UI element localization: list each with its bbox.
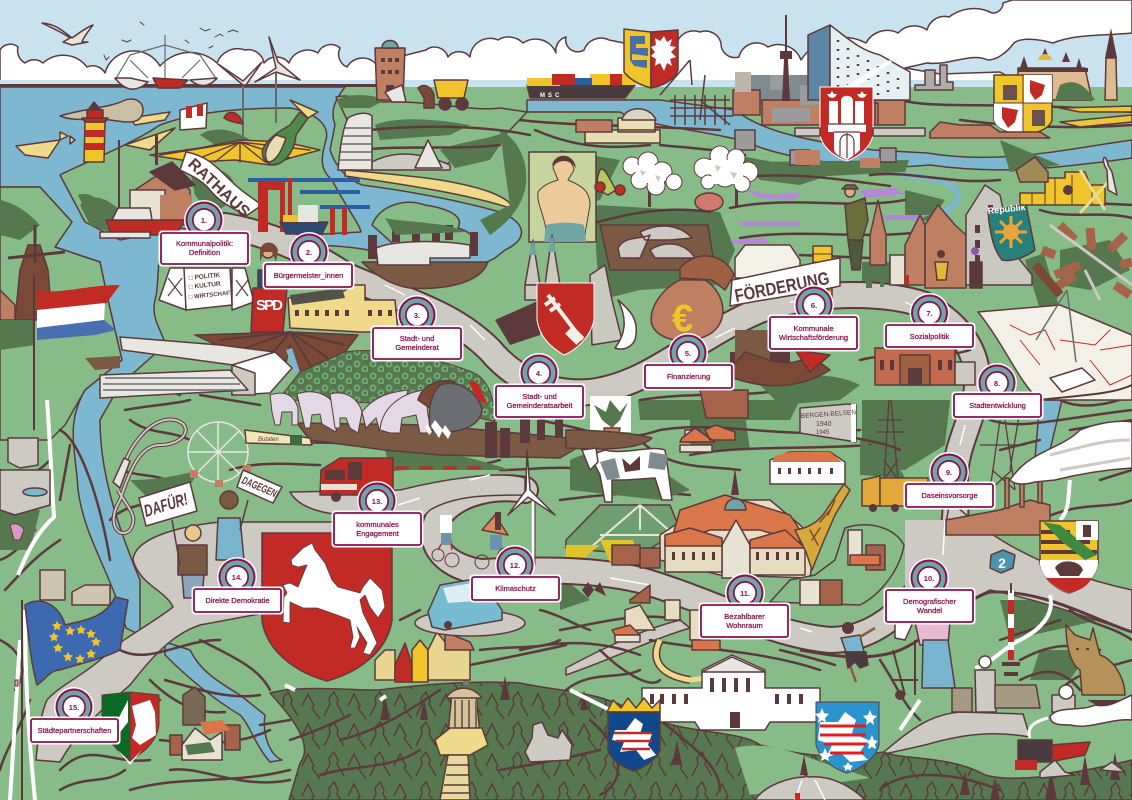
atom barrels and half-timbered house xyxy=(1016,157,1117,213)
hamburg skyline xyxy=(733,72,905,168)
hex sign 2 xyxy=(990,550,1015,573)
smoke xyxy=(1010,421,1132,520)
colourful gable houses xyxy=(375,632,474,682)
painting xyxy=(529,152,596,242)
coat of arms schleswig-holstein xyxy=(624,29,678,88)
neoclassical palace xyxy=(642,655,820,730)
republik shield: Republik xyxy=(987,202,1027,216)
beet field rays xyxy=(150,140,320,165)
hex sign 2: 2 xyxy=(998,555,1006,571)
sandbanks xyxy=(16,100,318,158)
atlantic hotel sail xyxy=(338,113,450,170)
dafuer sign xyxy=(139,482,197,526)
rathaus banner: RATHAUS xyxy=(184,155,253,221)
label 10: Demografischer xyxy=(903,597,956,606)
money bag: € xyxy=(672,298,693,340)
herrenhausen gardens xyxy=(566,505,680,562)
label 1 xyxy=(160,200,249,265)
port cranes and container ship xyxy=(248,178,370,235)
distant right skyline xyxy=(915,65,953,90)
purple heather xyxy=(730,188,930,244)
label 3: Gemeinderat xyxy=(395,343,440,352)
road markings xyxy=(385,285,965,632)
sozialpolitik brick hall xyxy=(875,348,975,385)
label 14: 14. xyxy=(232,573,242,582)
cabbage field xyxy=(282,351,495,422)
yellow palace xyxy=(288,285,398,332)
assembly circle boat xyxy=(362,218,488,288)
log circle xyxy=(1035,225,1132,320)
seagull xyxy=(42,23,93,45)
label 13: 13. xyxy=(372,497,382,506)
electric car xyxy=(415,578,525,636)
coat of arms bremen xyxy=(537,283,594,355)
clouds xyxy=(0,0,1132,82)
label 4: Stadt- und xyxy=(522,392,557,401)
sky xyxy=(0,0,1132,92)
lighthouse xyxy=(82,101,108,162)
west land strip xyxy=(0,187,122,440)
dagegen sign xyxy=(237,470,282,503)
label 9: Daseinsvorsorge xyxy=(921,491,978,500)
butter packet: Butaten xyxy=(258,437,279,443)
label 2: 2. xyxy=(306,248,312,257)
council crowd xyxy=(485,418,563,458)
label 13: kommunales xyxy=(356,520,399,529)
tulips xyxy=(10,524,24,686)
forest clearing around highway xyxy=(735,745,870,795)
label 8: Stadtentwicklung xyxy=(969,401,1026,410)
label 9 xyxy=(905,452,994,508)
bergen-belsen stone: BERGEN-BELSEN xyxy=(801,409,857,420)
office block and pond west xyxy=(0,438,50,515)
label 15: 15. xyxy=(69,703,79,712)
pylons xyxy=(876,400,1025,490)
voting book xyxy=(159,268,254,310)
fruits xyxy=(595,169,625,195)
fire truck xyxy=(320,458,393,502)
small palace behind banner xyxy=(735,245,800,278)
north land patches xyxy=(336,96,527,170)
label 6: Kommunale xyxy=(793,324,834,333)
steam train xyxy=(1015,718,1125,778)
horse wagon xyxy=(418,80,468,110)
mayor and spd podium xyxy=(251,242,287,332)
rathaus building and lightship xyxy=(100,135,195,238)
label 1: 1. xyxy=(201,216,207,225)
observatory xyxy=(576,109,660,143)
elbe river xyxy=(527,100,1132,170)
label 7: 7. xyxy=(926,309,933,318)
label 10: 10. xyxy=(924,574,934,583)
wind turbine centre xyxy=(508,450,555,565)
container ship MSC: MSC xyxy=(540,93,562,99)
sand path xyxy=(656,640,690,680)
label 3: Stadt- und xyxy=(400,334,434,343)
label 8: 8. xyxy=(994,379,1000,388)
plowed fan fields xyxy=(195,332,358,372)
voting book: □ POLITIK xyxy=(188,272,221,282)
dagegen sign: DAGEGEN! xyxy=(240,475,281,501)
rocks xyxy=(525,722,572,762)
boy xyxy=(841,622,875,682)
republik shield xyxy=(987,202,1035,261)
stairs xyxy=(440,755,470,800)
label 14 xyxy=(193,557,282,613)
label 14: Direkte Demokratie xyxy=(205,596,270,605)
elbphilharmonie xyxy=(808,25,910,100)
label 15: Städtepartnerschaften xyxy=(38,726,111,735)
cyclists xyxy=(432,512,512,569)
label 1: Definition xyxy=(189,248,220,257)
coat of arms nrw xyxy=(102,692,159,765)
birds xyxy=(104,22,238,60)
wind turbines xyxy=(218,37,300,140)
label 12: 12. xyxy=(510,561,520,570)
dark patches on the west land xyxy=(0,194,110,350)
coat of arms sachsen-anhalt xyxy=(1040,521,1098,593)
beach chair and parasol xyxy=(180,103,243,130)
wood deck under plant xyxy=(566,430,652,449)
potato xyxy=(695,193,723,211)
eu flag xyxy=(22,597,128,800)
small house group at road south xyxy=(582,582,720,650)
fishing boat xyxy=(115,35,217,89)
map book xyxy=(978,290,1132,400)
label 5: 5. xyxy=(685,349,691,358)
label 13 xyxy=(333,481,422,546)
label 12: Klimaschutz xyxy=(495,584,536,593)
bay island with assembly xyxy=(372,202,476,255)
label 1: Kommunalpolitik: xyxy=(176,239,233,248)
crane dock xyxy=(660,60,733,125)
potted plant xyxy=(590,396,631,440)
hanseatic village xyxy=(930,122,1050,138)
label 2 xyxy=(264,232,353,288)
pale distant horizon sea xyxy=(0,80,1132,90)
label 4: Gemeinderatsarbeit xyxy=(507,401,573,410)
label 3 xyxy=(372,295,462,360)
coat of arms mecklenburg-vorpommern xyxy=(994,75,1052,136)
brick barn and tower at centre xyxy=(700,330,830,418)
power plant xyxy=(946,458,1050,535)
orange truck xyxy=(862,476,928,512)
road loop district xyxy=(770,525,904,605)
roller coaster xyxy=(113,420,186,533)
label 11: Wohnraum xyxy=(726,621,763,630)
windmill xyxy=(0,225,65,345)
label 7 xyxy=(885,293,974,348)
main water: north sea and weser xyxy=(0,87,521,635)
label 6: Wirtschaftsförderung xyxy=(779,333,848,342)
bergen-belsen stone xyxy=(800,404,857,442)
mayor and spd podium: SPD xyxy=(256,297,283,314)
top-left island xyxy=(60,108,361,240)
label 10: Wandel xyxy=(917,606,942,615)
ferris wheel xyxy=(188,422,251,487)
white blossom trees xyxy=(623,146,758,208)
label 9: 9. xyxy=(946,468,952,477)
giraffe xyxy=(795,484,850,570)
coat of arms hamburg xyxy=(820,87,873,161)
label 5: Finanzierung xyxy=(667,372,710,381)
coat of arms lower saxony xyxy=(262,533,392,681)
beach strip xyxy=(345,170,511,208)
tv tower xyxy=(780,15,792,101)
radio tower xyxy=(952,583,1075,712)
road xyxy=(36,226,1132,762)
dafuer sign: DAFÜR! xyxy=(142,489,190,521)
money bag xyxy=(651,256,734,341)
label 5 xyxy=(644,333,733,389)
forest tree spikes xyxy=(380,676,1132,800)
schwerin castle xyxy=(1018,28,1117,100)
island dark trees xyxy=(80,130,250,235)
north land dark tree bands xyxy=(337,95,510,168)
hannover town hall quarter xyxy=(612,468,815,578)
celle castle xyxy=(770,452,845,484)
muenster old town xyxy=(170,687,240,760)
white trail xyxy=(10,400,1051,800)
bergen-belsen stone: 1945 xyxy=(816,430,830,436)
label 8 xyxy=(953,363,1042,418)
label 3: 3. xyxy=(414,311,420,320)
label 4 xyxy=(495,353,584,418)
label 7: Sozialpolitik xyxy=(910,332,950,341)
container ship MSC xyxy=(527,74,636,99)
forest xyxy=(270,682,1132,800)
running track xyxy=(395,466,485,470)
cow xyxy=(582,448,672,502)
beer bottle xyxy=(262,112,308,165)
yellow strip east xyxy=(1060,106,1132,127)
label 11: Bezahlbarer xyxy=(724,612,765,621)
seal sandbank xyxy=(60,99,143,122)
dom and bremen figures xyxy=(495,235,636,349)
lynx xyxy=(1066,625,1125,695)
label 6: 6. xyxy=(811,301,817,310)
clouds south-east xyxy=(1050,695,1132,726)
butter packet xyxy=(245,430,312,445)
castle west xyxy=(40,570,110,605)
small orange-roof houses xyxy=(680,425,735,452)
megalith stones on wood floor xyxy=(600,225,715,270)
brick town and gable buildings xyxy=(870,185,1032,288)
label 2: Bürgermeister_innen xyxy=(274,271,343,280)
voting book: □ KULTUR xyxy=(188,281,221,291)
label 4: 4. xyxy=(536,369,542,378)
label 11 xyxy=(700,573,789,638)
river lower middle xyxy=(165,642,282,762)
foerderung banner: FÖRDERUNG xyxy=(733,268,831,306)
woman with walker xyxy=(893,618,955,700)
wooden floor under pigs xyxy=(297,423,590,458)
bottom highway xyxy=(755,775,865,800)
coat of arms thuringia xyxy=(815,702,879,773)
turkey xyxy=(418,381,488,439)
label 12 xyxy=(471,545,560,601)
voting book: □ WIRTSCHAFT xyxy=(189,290,234,301)
label 10 xyxy=(885,558,974,623)
pigs xyxy=(270,390,432,433)
dark green field bands xyxy=(480,130,1100,680)
river upper east industrial xyxy=(1034,400,1062,470)
forest field strips xyxy=(290,690,1000,795)
hermann monument xyxy=(435,650,488,755)
bergen-belsen stone: 1940 xyxy=(816,421,832,428)
neuwerk tower xyxy=(375,40,406,102)
hiker xyxy=(842,185,868,270)
label 6 xyxy=(769,285,858,350)
label 11: 11. xyxy=(740,589,750,598)
dutch flag xyxy=(34,275,120,430)
meyer shipyard and cruise ship xyxy=(85,337,292,398)
label 13: Engagement xyxy=(356,529,400,538)
coat of arms hesse xyxy=(607,698,660,771)
town people xyxy=(866,247,982,288)
dark tree band under city xyxy=(0,248,1130,550)
label 15 xyxy=(30,687,119,743)
shoreline quay xyxy=(795,128,925,136)
small stream xyxy=(900,173,958,225)
demonstrators xyxy=(172,491,248,598)
coin stack xyxy=(806,246,832,300)
